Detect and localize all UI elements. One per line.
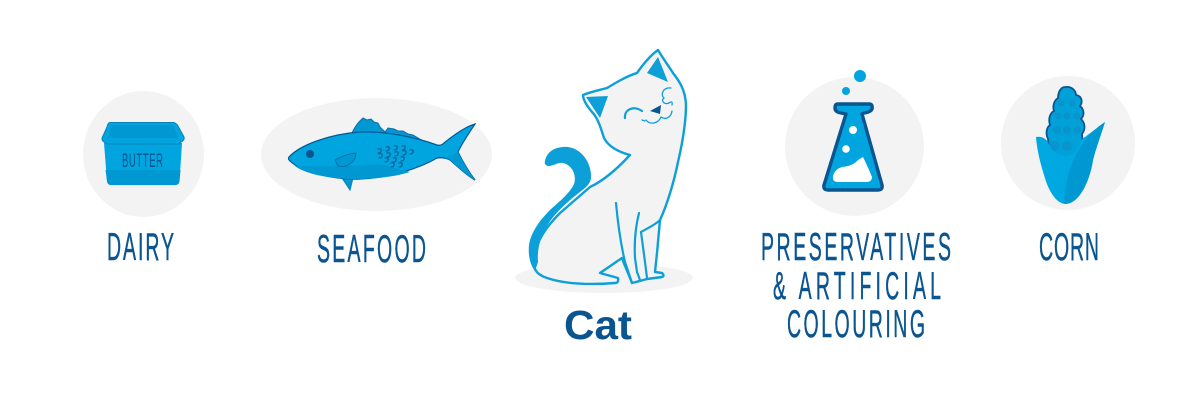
corn husk — [1036, 122, 1105, 204]
preservatives label: PRESERVATIVES — [761, 225, 951, 269]
preservatives label: COLOURING — [787, 302, 925, 346]
seafood background ellipse — [261, 98, 492, 211]
cat face — [625, 88, 672, 123]
corn cob — [1047, 87, 1084, 160]
fish eye — [306, 150, 314, 158]
dairy background circle — [83, 91, 204, 217]
flask inner bubbles — [849, 126, 857, 134]
fish scales — [378, 146, 413, 167]
cat body — [534, 50, 686, 284]
butter label: BUTTER — [122, 151, 163, 172]
cat front legs — [616, 203, 660, 283]
rising bubbles — [854, 70, 866, 82]
preservatives label — [761, 225, 951, 346]
icon: flask — [824, 70, 882, 190]
cat label: Cat — [564, 302, 632, 348]
icon: butter tub — [102, 122, 184, 185]
icon: cat — [529, 50, 686, 284]
cat ears — [647, 57, 668, 82]
flask liquid highlight — [833, 157, 872, 182]
dairy label: DAIRY — [107, 225, 174, 269]
cat tail — [529, 147, 591, 271]
panel: cat — [515, 50, 693, 348]
panel: corn — [1001, 76, 1135, 269]
fish pectoral fin — [335, 153, 356, 167]
seafood label: SEAFOOD — [317, 227, 426, 271]
panel: seafood — [261, 98, 492, 271]
preservatives label: & ARTIFICIAL — [773, 264, 941, 308]
corn label: CORN — [1039, 225, 1099, 269]
flask background circle — [785, 77, 924, 216]
corn background circle — [1001, 76, 1135, 210]
cat nose — [650, 105, 661, 114]
corn kernels — [1049, 100, 1081, 151]
icon: corn — [1036, 87, 1105, 204]
panel: dairy — [83, 91, 204, 269]
cat ground shadow — [515, 263, 693, 293]
icon: fish — [288, 118, 475, 190]
panel: preservatives and artificial colouring — [761, 70, 951, 346]
